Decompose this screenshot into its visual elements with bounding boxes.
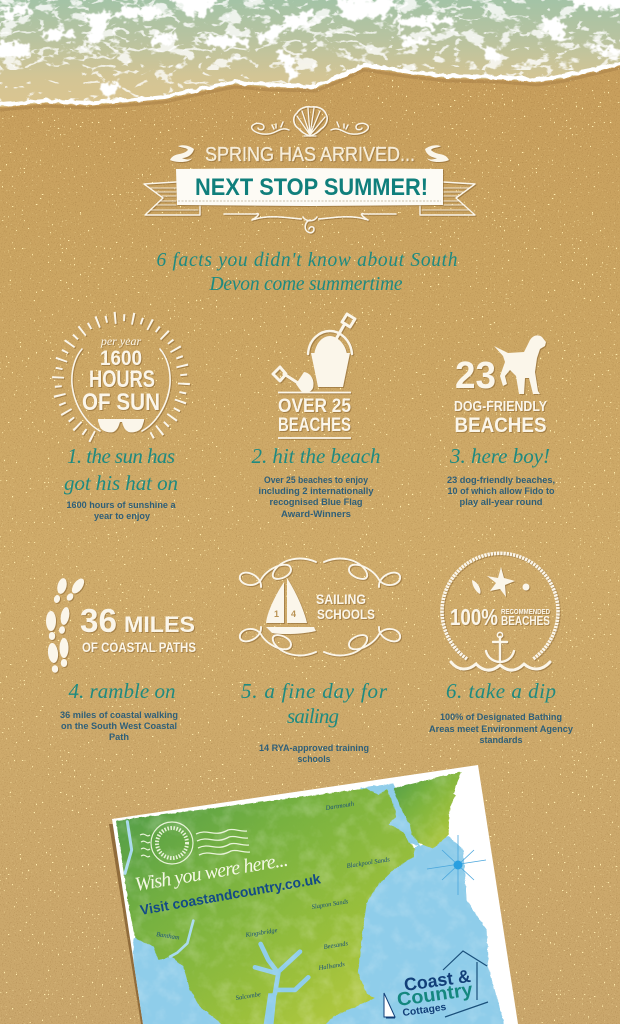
description 2: Over 25 beaches to enjoy [264, 475, 368, 485]
place names: Bantham [156, 931, 180, 942]
heading 6: 6. take a dip [446, 679, 556, 703]
description 4 [60, 710, 178, 742]
title block [144, 107, 475, 233]
icon: rope ring, anchor and 100% recommended beaches: RECOMMENDED [501, 607, 550, 616]
description 4: Path [109, 732, 129, 742]
land [116, 772, 462, 1024]
subtitle: 6 facts you didn't know about South [156, 250, 458, 271]
sea and foam [0, 0, 620, 110]
heading: spring has arrived: SPRING HAS ARRIVED... [205, 144, 415, 166]
description 2 [258, 475, 374, 519]
description 6: 100% of Designated Bathing [440, 712, 562, 722]
rivers [125, 822, 308, 1003]
postmark [140, 822, 250, 864]
fact 1: sun [58, 318, 184, 521]
icon: dog-friendly beaches badge: BEACHES [454, 414, 546, 437]
description 2: Award-Winners [281, 509, 351, 519]
description 3: 23 dog-friendly beaches, [447, 475, 555, 485]
logo: Cottages [402, 1002, 447, 1019]
heading 4: 4. ramble on [68, 679, 176, 703]
place names: Salcombe [235, 991, 261, 1002]
icon: dog-friendly beaches badge [454, 335, 547, 437]
icon: bucket and spades: BEACHES [278, 415, 351, 436]
icon: left flourish [170, 145, 194, 162]
fact 6: bathing [429, 553, 573, 745]
icon: rope frame, boat and sailing schools: SCHOOLS [317, 606, 375, 622]
description 4: on the South West Coastal [61, 721, 177, 731]
heading 5 [241, 679, 388, 728]
water [0, 0, 620, 110]
place names: Dartmouth [324, 801, 354, 812]
description 5: 14 RYA-approved training [259, 743, 369, 753]
icon: sun with sunglasses: 1600 [100, 347, 142, 370]
heading 3: 3. here boy! [449, 444, 550, 468]
description 4: 36 miles of coastal walking [60, 710, 178, 720]
compass [427, 835, 486, 895]
logo [384, 951, 488, 1019]
icon: rope ring, anchor and 100% recommended beaches [442, 553, 558, 670]
icon: scallop shell ornament [252, 107, 368, 136]
heading 5: 5. a fine day for [241, 679, 388, 703]
description 3: 10 of which allow Fido to [448, 486, 555, 496]
icon: sun with sunglasses: OF SUN [82, 389, 160, 416]
icon: footprints and 36 miles: MILES [124, 612, 195, 637]
description 5 [259, 743, 369, 764]
heading 5: sailing [287, 704, 339, 728]
description 1: 1600 hours of sunshine a [66, 500, 177, 510]
sea [133, 783, 505, 1024]
card paper [112, 765, 518, 1024]
place names: Hallsands [317, 961, 346, 972]
heading: next stop summer: NEXT STOP SUMMER! [195, 174, 428, 201]
heading 1: got his hat on [64, 471, 178, 495]
description 1 [66, 500, 177, 521]
banner [176, 168, 443, 206]
banner stitches [178, 200, 441, 202]
description 3: play all-year round [460, 497, 542, 507]
icon: bucket and spades: OVER 25 [278, 396, 351, 417]
tagline: Wish you were here... [133, 849, 290, 896]
wet sand shadow [0, 68, 620, 110]
icon: sun with sunglasses [58, 318, 184, 437]
place names [156, 801, 391, 1002]
fact 5: sailing [240, 559, 400, 764]
icon: rope frame, boat and sailing schools [240, 559, 400, 655]
icon: footprints and 36 miles [46, 576, 196, 673]
heading 1 [64, 444, 178, 495]
place names: Kingsbridge [244, 927, 278, 939]
logo: Country [396, 980, 474, 1011]
icon: footprints and 36 miles: 36 [80, 602, 117, 639]
icon: footprints and 36 miles: OF COASTAL PATHS [82, 639, 196, 655]
icon: right flourish [425, 145, 449, 162]
icon: sun with sunglasses: per year [100, 334, 141, 348]
icon: rope frame, boat and sailing schools: 1 [274, 609, 279, 619]
heading 1: 1. the sun has [67, 444, 175, 468]
heading 2: 2. hit the beach [252, 444, 380, 468]
icon: sun with sunglasses: HOURS [89, 366, 155, 393]
fact 4: coastal paths [46, 576, 196, 742]
icon: rope frame, boat and sailing schools: SAILING [316, 591, 366, 607]
icon: rope ring, anchor and 100% recommended beaches: BEACHES [501, 613, 550, 628]
place names: Beesands [323, 940, 349, 951]
icon: dog-friendly beaches badge: DOG-FRIENDLY [454, 398, 547, 415]
fact 3: dogs [447, 335, 555, 507]
fact 2: beaches [252, 314, 380, 519]
description 6 [429, 712, 573, 745]
subtitle: Devon come summertime [208, 274, 403, 295]
description 2: including 2 internationally [258, 486, 374, 496]
icon: rope frame, boat and sailing schools: 4 [291, 609, 296, 619]
icon: dog-friendly beaches badge: 23 [455, 355, 496, 397]
subtitle [156, 250, 458, 295]
description 6: standards [480, 735, 522, 745]
place names: Slapton Sands [311, 898, 349, 911]
description 3 [447, 475, 555, 507]
icon: rope ring, anchor and 100% recommended beaches: 100% [450, 604, 498, 630]
description 2: recognised Blue Flag [270, 497, 362, 507]
place names: Blackpool Sands [346, 856, 391, 870]
watercolour mottling [116, 772, 500, 1024]
description 1: year to enjoy [94, 511, 150, 521]
description 6: Areas meet Environment Agency [429, 724, 573, 734]
card shadow [109, 824, 150, 1024]
logo: Coast & [403, 966, 472, 995]
wave edge foam [0, 63, 620, 105]
postcard map [100, 760, 530, 1024]
ribbon tails [144, 182, 475, 215]
lower ornament [224, 214, 396, 233]
web address: Visit coastandcountry.co.uk [139, 870, 322, 918]
icon: bucket and spades [273, 314, 355, 438]
description 5: schools [298, 754, 330, 764]
